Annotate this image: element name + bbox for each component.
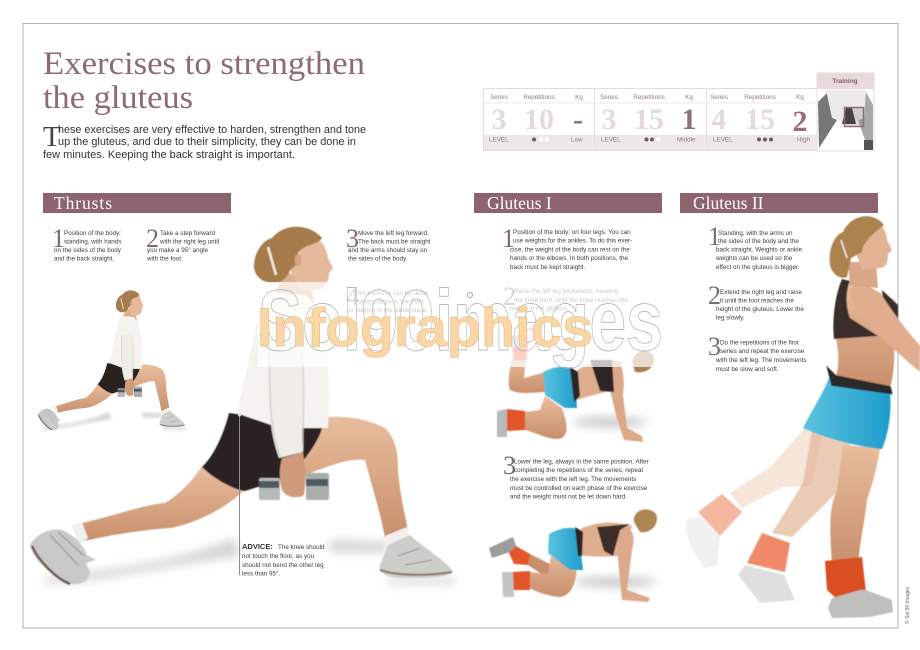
thrusts step 1 bbox=[52, 224, 122, 262]
gluteus II step 1: the sides of the body and the bbox=[718, 238, 799, 245]
level low column: LEVEL bbox=[489, 136, 509, 144]
rear leg, faded bbox=[686, 428, 822, 568]
level middle column: Repetitions bbox=[633, 94, 665, 101]
gluteus I step 1: 1 bbox=[502, 224, 515, 253]
thrusts step 1: and the back straight. bbox=[54, 256, 114, 262]
gluteus II step 3: Do the repetitions of the first bbox=[720, 340, 799, 346]
intro text: few minutes. Keeping the back straight is important. bbox=[43, 149, 295, 161]
level low column: Repetitions bbox=[523, 94, 555, 101]
gluteus II step 2: height of the gluteus. Lower the bbox=[716, 306, 804, 313]
level middle column: LEVEL bbox=[601, 136, 621, 144]
photo: gluteus II pose with ankle weights bbox=[686, 216, 920, 618]
level high column: 2 bbox=[792, 105, 808, 138]
title bbox=[43, 46, 365, 116]
title: the gluteus bbox=[43, 80, 193, 116]
thrusts step 1: 1 bbox=[52, 224, 65, 253]
thrusts step 4: taking steps to the front bbox=[358, 298, 424, 306]
level low column: Series bbox=[490, 94, 508, 101]
gluteus I step 3: completing the repetitions of the series, repeat bbox=[514, 467, 643, 474]
neck and head bbox=[848, 262, 878, 288]
gluteus I step 2: the knee bent, until the knee reaches the bbox=[514, 297, 628, 304]
gluteus II step 1 bbox=[708, 222, 802, 271]
thrusts step 2: 2 bbox=[146, 224, 159, 253]
thrusts step 2: with the foot. bbox=[146, 256, 183, 262]
gluteus II step 1: effect on the gluteus is bigger. bbox=[716, 264, 800, 271]
level middle column bbox=[600, 94, 696, 144]
thrusts step 3 bbox=[346, 224, 431, 262]
gluteus II step 1: weights can be used so the bbox=[715, 255, 793, 262]
gluteus II step 2 bbox=[708, 281, 804, 322]
gluteus II step 2: Extend the right leg and raise bbox=[720, 289, 802, 296]
level low column: 10 bbox=[524, 103, 554, 136]
gluteus I step 3: 3 bbox=[503, 451, 516, 480]
intro text: hese exercises are very effective to harden, strengthen and tone bbox=[58, 124, 366, 136]
gluteus II step 3: with the left leg. The movements bbox=[715, 357, 807, 364]
gluteus I step 1: Position of the body: on four legs. You can bbox=[513, 229, 631, 236]
gluteus I step 3 bbox=[503, 451, 649, 500]
thrusts step 2 bbox=[146, 224, 219, 262]
photo: small lunge figure bbox=[38, 290, 186, 430]
level low column: 3 bbox=[492, 103, 506, 136]
sports top bbox=[833, 279, 878, 339]
gluteus I step 1: back must be kept straight. bbox=[510, 264, 585, 271]
gluteus I step 3: and the weight must not be let down hard. bbox=[510, 494, 627, 500]
gluteus I step 2: 2 bbox=[503, 282, 516, 311]
copyright note: © Sol 90 Images bbox=[904, 586, 911, 624]
level low column: - bbox=[573, 103, 583, 136]
level high column: LEVEL bbox=[713, 136, 733, 144]
gluteus I step 1: cise, the weight of the body can rest on the bbox=[510, 246, 630, 254]
watermark: Sol90images bbox=[258, 273, 663, 369]
photo: gluteus I lowered leg pose bbox=[489, 509, 657, 602]
torso bbox=[836, 282, 895, 388]
section heading: Thrusts bbox=[43, 193, 231, 213]
level middle column: 15 bbox=[634, 103, 664, 136]
gluteus I step 2: height of the gluteus. bbox=[510, 306, 569, 312]
photo: large lunge figure bbox=[30, 227, 455, 584]
thrusts step 1: on the sides of the body bbox=[54, 247, 122, 254]
advice callout: not touch the floor, as you bbox=[242, 553, 315, 560]
advice callout: ADVICE: bbox=[242, 542, 273, 551]
section heading: Gluteus II bbox=[680, 193, 878, 213]
thrusts step 3: 3 bbox=[346, 224, 359, 253]
gluteus II step 3: 3 bbox=[708, 332, 721, 361]
gluteus I step 3: the exercise with the left leg. The movements bbox=[510, 476, 636, 483]
gluteus II step 3: series and repeat the exercise bbox=[720, 348, 805, 355]
gluteus I step 2: Raise the left leg backwards, keeping bbox=[514, 288, 619, 295]
level high column: 4 bbox=[712, 103, 726, 136]
gluteus I step 1: hands or the elbows. In both positions, the bbox=[510, 255, 628, 262]
thrusts step 4: This exercise can be done bbox=[354, 290, 428, 297]
thrusts step 2: Take a step forward bbox=[160, 230, 215, 237]
gluteus I step 1: use weights for the ankles. To do this exer- bbox=[513, 238, 632, 244]
section heading: Gluteus I: Gluteus I bbox=[487, 193, 552, 213]
gluteus II step 2: 2 bbox=[708, 281, 721, 310]
thrusts step 4: or staying in the same place. bbox=[348, 307, 428, 314]
thrusts step 4 bbox=[346, 282, 428, 314]
middle leg, half-faded bbox=[738, 430, 850, 603]
gluteus II step 1: back straight. Weights or ankle bbox=[716, 246, 802, 254]
thrusts step 3: the sides of the body. bbox=[348, 256, 408, 262]
arm bbox=[850, 285, 920, 372]
intro text: up the gluteus, and due to their simplicity, they can be done in bbox=[58, 136, 356, 148]
gluteus I step 3: must be controlled on each phase of the exercise bbox=[510, 485, 648, 492]
gluteus II step 3 bbox=[708, 332, 807, 373]
level low column bbox=[489, 94, 583, 144]
advice callout: should not bend the other leg bbox=[242, 562, 324, 569]
photo: gluteus I raised leg pose bbox=[497, 334, 654, 442]
thrusts step 3: Move the left leg forward. bbox=[358, 230, 429, 237]
thrusts step 1: standing, with hands bbox=[64, 238, 121, 246]
level middle column: 1 bbox=[682, 103, 696, 136]
watermark: Infographics bbox=[257, 296, 593, 358]
advice callout: less than 95°. bbox=[242, 570, 280, 578]
thrusts step 4: 4 bbox=[346, 282, 359, 311]
gluteus II step 1: 1 bbox=[708, 222, 721, 251]
level high column: Series bbox=[710, 94, 728, 101]
standing leg bbox=[830, 445, 880, 565]
gluteus II step 2: leg slowly. bbox=[716, 314, 745, 322]
thrusts step 2: you make a 95° angle bbox=[147, 246, 208, 254]
shorts bbox=[803, 375, 891, 449]
thrusts step 2: with the right leg until bbox=[159, 238, 219, 246]
section heading: Gluteus II: Gluteus II bbox=[693, 193, 764, 213]
level low column: Kg bbox=[575, 94, 583, 101]
level high column: High bbox=[797, 136, 810, 144]
advice callout: The knee should bbox=[278, 544, 325, 551]
gluteus I step 2 bbox=[503, 282, 628, 312]
training thumbnail: Training bbox=[832, 78, 858, 85]
intro text: T bbox=[43, 121, 61, 153]
thrusts step 1: Position of the body: bbox=[64, 230, 121, 237]
level middle column: Middle bbox=[677, 136, 696, 144]
level low column: Low bbox=[571, 136, 583, 144]
gluteus II step 2: it until the foot reaches the bbox=[720, 298, 794, 304]
gluteus II step 3: must be slow and soft. bbox=[716, 366, 779, 373]
level middle column: Series bbox=[600, 94, 618, 101]
level middle column: Kg bbox=[685, 94, 693, 101]
gluteus I step 3: Lower the leg, always in the same position. After bbox=[514, 458, 649, 466]
level high column: Kg bbox=[796, 94, 804, 101]
level high column bbox=[710, 94, 810, 144]
advice callout bbox=[238, 414, 325, 578]
training thumbnail bbox=[817, 73, 874, 151]
thrusts step 3: and the arms should stay on bbox=[348, 247, 428, 254]
level middle column: 3 bbox=[602, 103, 616, 136]
intro text bbox=[43, 121, 366, 161]
gluteus I step 1 bbox=[502, 224, 632, 271]
level high column: Repetitions bbox=[744, 94, 776, 101]
title: Exercises to strengthen bbox=[43, 46, 365, 82]
training levels table bbox=[483, 88, 874, 150]
section heading: Thrusts: Thrusts bbox=[54, 193, 112, 213]
gluteus II step 1: Standing, with the arms on bbox=[718, 230, 793, 237]
thrusts step 3: The back must be straight bbox=[358, 238, 431, 246]
level high column: 15 bbox=[745, 103, 775, 136]
section heading: Gluteus I bbox=[474, 193, 662, 213]
